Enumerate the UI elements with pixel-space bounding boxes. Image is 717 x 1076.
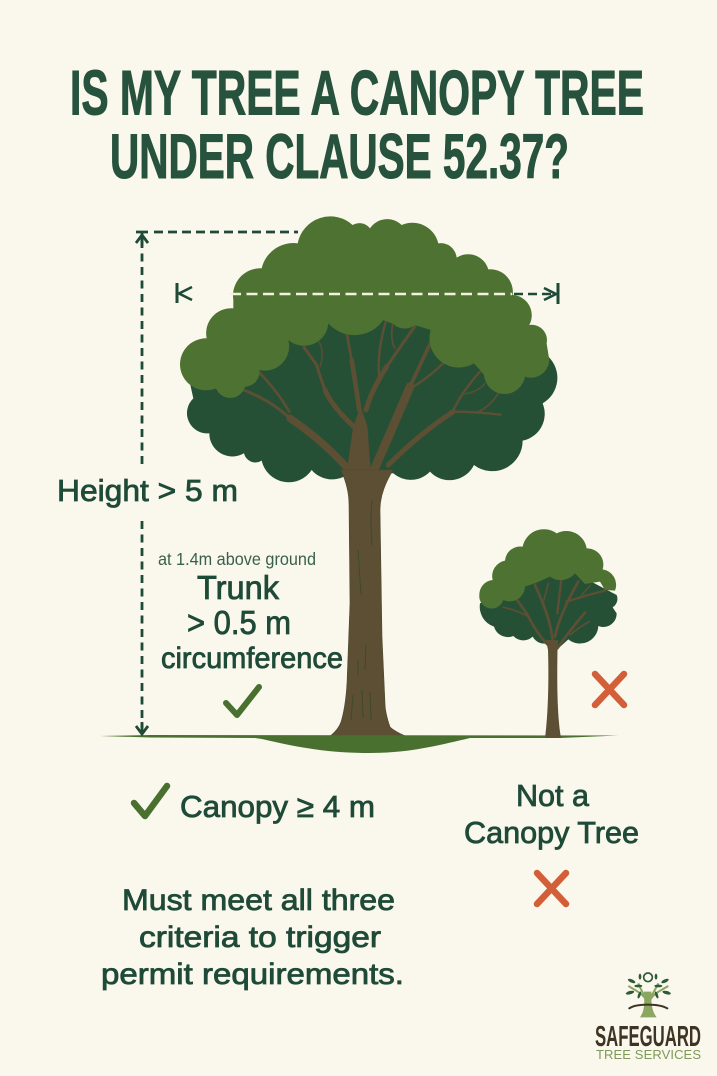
icon: not a canopy cross	[537, 873, 566, 904]
small tree branches	[503, 577, 605, 648]
summary text: Must meet all three	[122, 884, 395, 917]
ground with mound	[100, 735, 618, 753]
trunk criteria label: > 0.5 m	[187, 604, 291, 641]
trunk	[325, 470, 418, 743]
trunk criteria label: circumference	[161, 642, 343, 675]
height label: Height > 5 m	[57, 473, 238, 508]
large canopy tree	[180, 216, 557, 743]
light upper canopy	[180, 216, 549, 398]
not a canopy tree label: Canopy Tree	[464, 815, 639, 850]
icon: trunk check	[226, 687, 259, 715]
canopy width dimension arrow	[177, 283, 558, 304]
small tree dark canopy	[480, 560, 617, 648]
logo tagline: TREE SERVICES	[596, 1047, 701, 1062]
not a canopy tree label	[464, 778, 639, 850]
logo tree icon	[625, 973, 671, 1017]
small tree	[479, 529, 617, 738]
dark lower canopy	[187, 277, 557, 482]
icon: canopy check	[134, 786, 167, 816]
summary text	[101, 884, 404, 991]
branches	[245, 321, 501, 473]
icon: small tree cross	[595, 674, 624, 705]
logo: Safeguard Tree Services	[595, 973, 701, 1062]
summary text: criteria to trigger	[139, 921, 381, 954]
trunk criteria label	[158, 549, 343, 675]
title	[70, 58, 644, 192]
height dimension arrow	[136, 232, 298, 734]
small tree trunk	[545, 640, 561, 738]
not a canopy tree label: Not a	[516, 778, 590, 813]
trunk bark lines	[351, 500, 372, 720]
small tree light canopy	[479, 529, 616, 608]
canopy criteria label: Canopy ≥ 4 m	[180, 789, 375, 824]
trunk criteria label: at 1.4m above ground	[158, 549, 316, 569]
summary text: permit requirements.	[101, 958, 404, 991]
trunk criteria label: Trunk	[197, 569, 279, 606]
